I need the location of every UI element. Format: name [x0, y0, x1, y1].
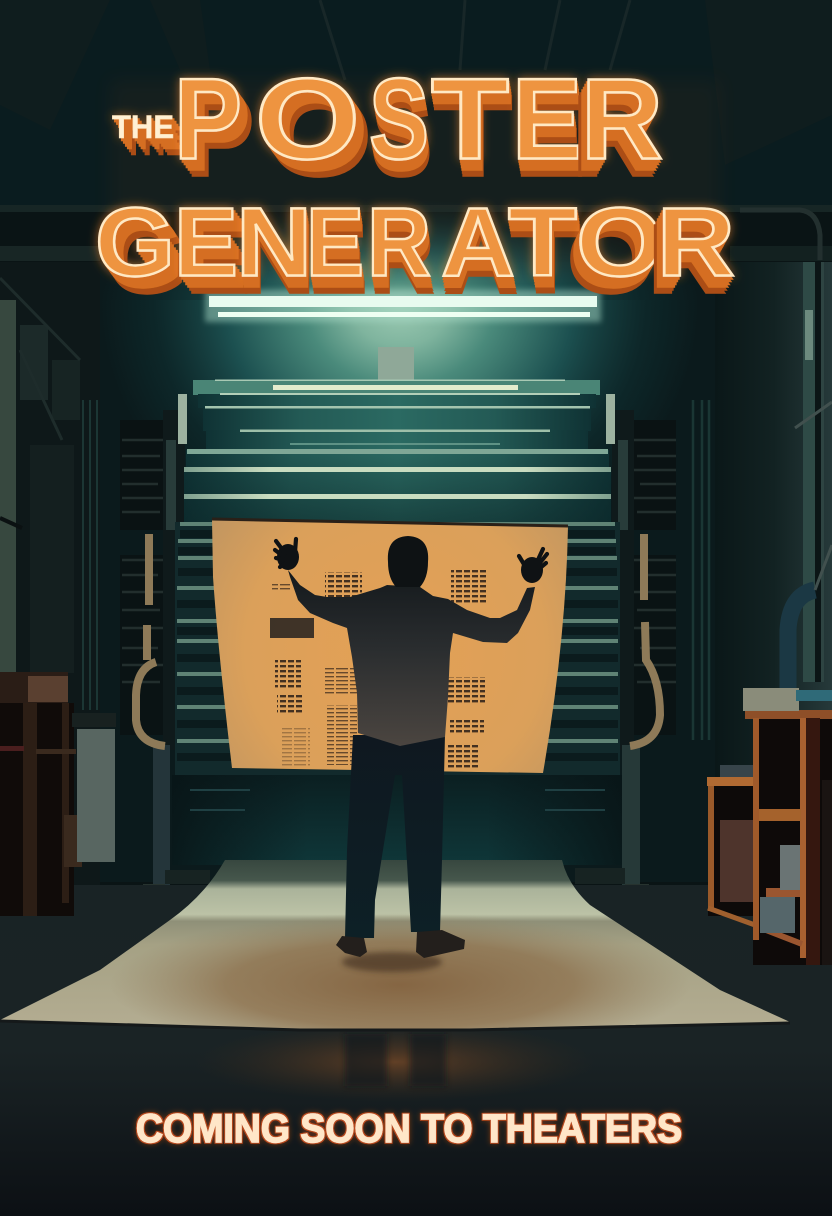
- light fixture: [205, 290, 601, 381]
- left shelf: [0, 672, 82, 916]
- paper sheet on the floor: [0, 860, 790, 1032]
- base of machine: [143, 745, 649, 898]
- title word: POSTER: T: [431, 56, 509, 184]
- hanging poster print: [212, 519, 568, 773]
- teal light glow: [134, 212, 665, 449]
- printed marks: [270, 568, 487, 770]
- floor: [0, 885, 832, 1216]
- title word: POSTER: O: [255, 56, 360, 184]
- title word: POSTER: [174, 56, 663, 184]
- printing press: [120, 380, 676, 898]
- left hand: [275, 539, 299, 570]
- title word: THE: THE: [112, 109, 174, 145]
- title: [95, 56, 735, 296]
- side gears left: [120, 394, 187, 750]
- shoes: [336, 930, 465, 958]
- title word: GENERATOR: R: [657, 188, 735, 296]
- hose right: [630, 534, 660, 746]
- tagline: COMING SOON TO THEATERS: [136, 1107, 682, 1151]
- lower rollers: [175, 522, 620, 777]
- title word: GENERATOR: E: [306, 188, 364, 296]
- man silhouette: [275, 536, 547, 958]
- title word: GENERATOR: E: [174, 188, 238, 296]
- title glow: [110, 80, 720, 270]
- head: [388, 536, 428, 587]
- white cabinet: [72, 713, 116, 862]
- upper rollers: [184, 380, 611, 523]
- title word: POSTER: P: [174, 56, 242, 184]
- title word: POSTER: R: [581, 56, 663, 184]
- hose left: [136, 534, 165, 746]
- title word: GENERATOR: N: [236, 188, 312, 296]
- left wall: [0, 262, 100, 887]
- right shelves: [707, 688, 832, 965]
- title word: GENERATOR: T: [508, 188, 577, 296]
- title word: GENERATOR: [95, 188, 735, 296]
- shirt and arms: [288, 570, 535, 746]
- side gears right: [606, 394, 676, 750]
- title word: POSTER: S: [369, 56, 429, 184]
- title word: GENERATOR: R: [367, 188, 431, 296]
- legs: [345, 735, 445, 938]
- right hand: [519, 549, 547, 583]
- title word: GENERATOR: G: [95, 188, 175, 296]
- title word: GENERATOR: A: [441, 188, 515, 296]
- right wall and pipes: [693, 210, 832, 887]
- title word: POSTER: E: [512, 56, 582, 184]
- title word: GENERATOR: O: [576, 188, 664, 296]
